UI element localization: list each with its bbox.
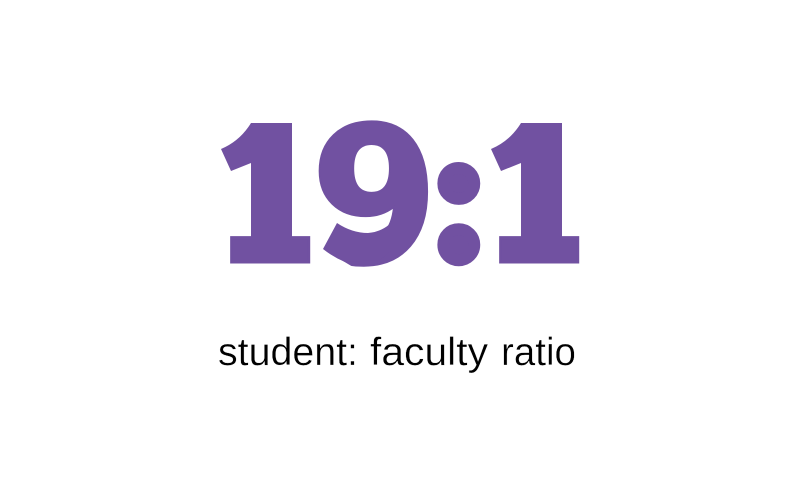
caption <box>218 331 576 374</box>
big ratio number <box>214 86 588 309</box>
colon: : <box>428 88 491 300</box>
caption: faculty <box>370 331 489 374</box>
caption: ratio <box>501 331 576 374</box>
caption: student: <box>218 331 358 374</box>
digit nine: 9 <box>310 86 439 309</box>
digit one, left: 1 <box>214 88 319 307</box>
digit one, right: 1 <box>483 88 588 307</box>
